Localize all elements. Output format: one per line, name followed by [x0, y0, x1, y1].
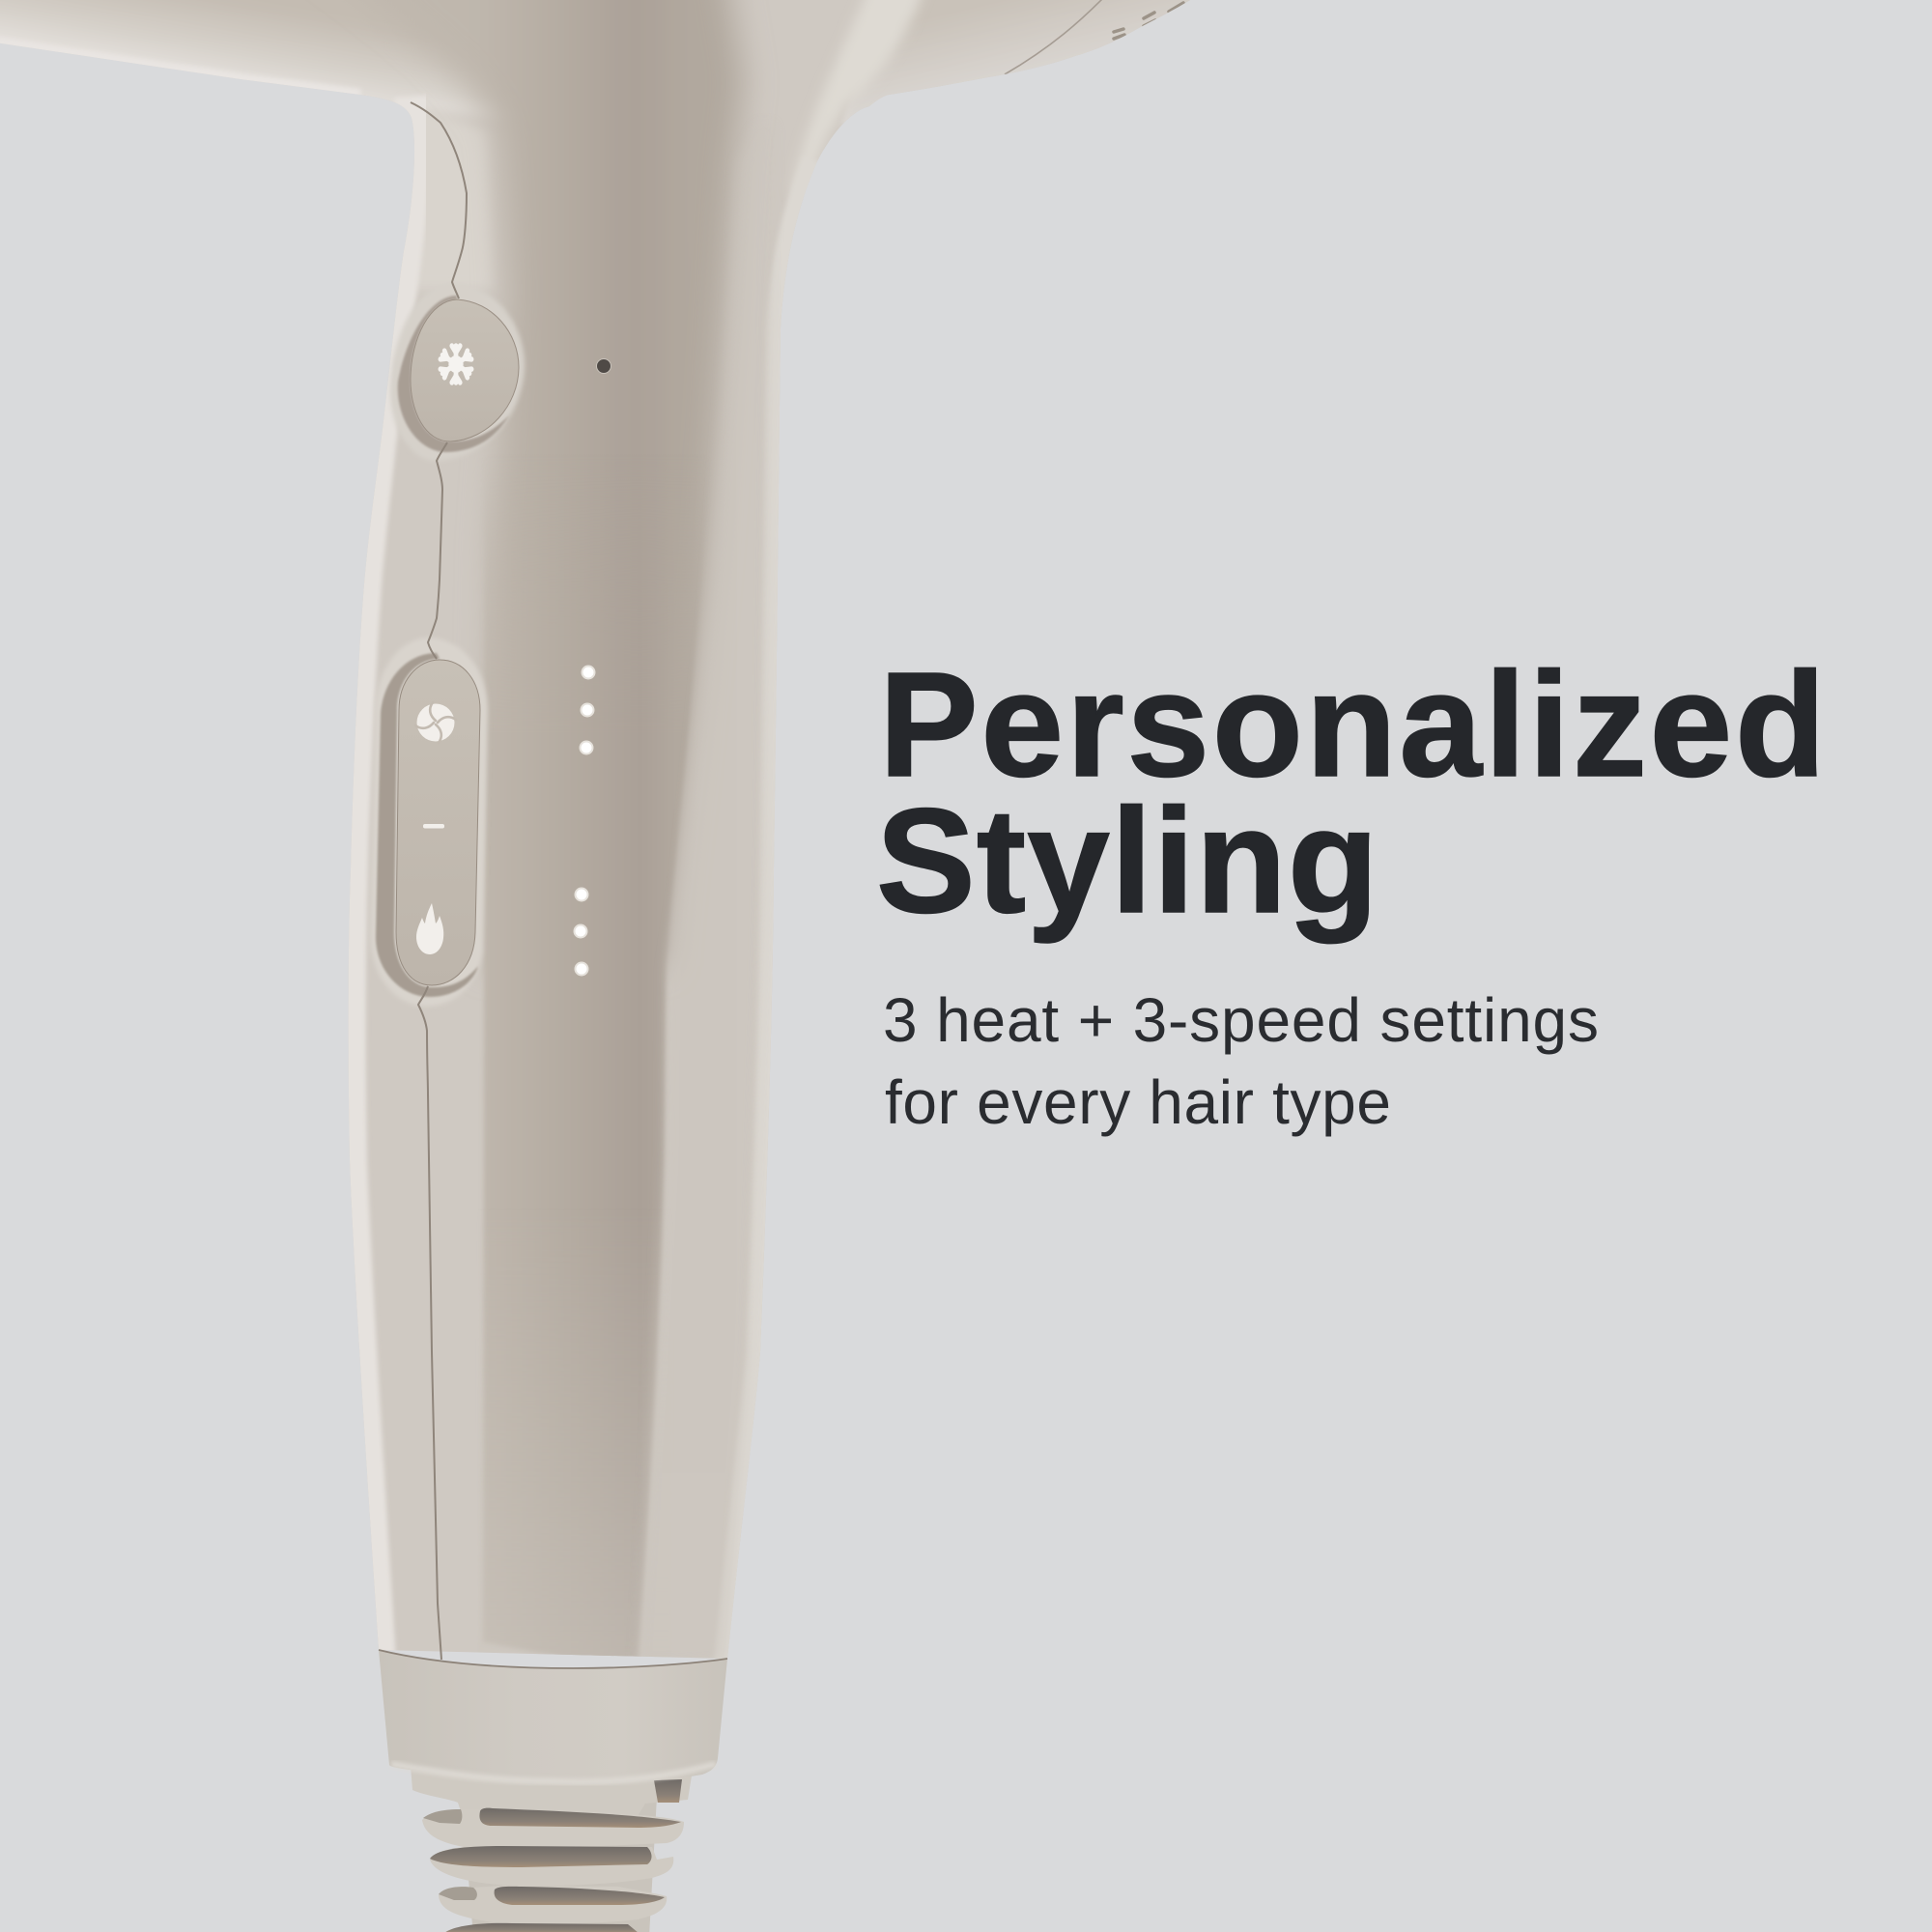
left edge highlight: [349, 97, 413, 1662]
subheading: 3 heat + 3-speed settings: [883, 985, 1599, 1055]
barrel right: [842, 0, 1142, 123]
heading: [876, 641, 1826, 944]
rocker recess: [376, 653, 478, 997]
icon: flame: [416, 903, 443, 954]
cool shot button: [390, 283, 525, 461]
hair dryer: [0, 0, 1222, 1932]
rocker face: [396, 660, 480, 985]
vent slots: [1114, 3, 1183, 39]
barrel left shading: [0, 0, 479, 115]
band light right: [717, 1499, 734, 1656]
lower lightening: [485, 1379, 649, 1656]
heat indicator lights: [574, 889, 587, 976]
central shaded zone upper: [442, 0, 753, 956]
right edge strip: [727, 161, 817, 1671]
barrel seam: [1005, 0, 1103, 74]
bright neck band: [800, 0, 923, 158]
dryer body: [0, 0, 1222, 1686]
central shaded zone lower: [483, 662, 692, 1657]
button face: [411, 299, 519, 441]
speed indicator lights: [580, 667, 595, 753]
rocker rim: [370, 638, 488, 1007]
subheading: for every hair type: [885, 1067, 1391, 1137]
collar: [379, 1650, 727, 1784]
indicator sensor dot: [597, 359, 611, 373]
cord strain relief: [411, 1766, 693, 1932]
icon: snowflake: [440, 346, 471, 383]
speed and heat rocker button: [370, 638, 488, 1007]
body seam line: [411, 102, 467, 1660]
body base: [365, 0, 867, 1658]
button recess: [398, 296, 509, 452]
icon: off dash: [423, 824, 444, 829]
icon: fan: [415, 702, 456, 743]
heading: Styling: [876, 778, 1378, 944]
button rim: [390, 283, 525, 461]
neck left light area: [420, 119, 489, 286]
heading: Personalized: [879, 641, 1826, 808]
subheading: [883, 985, 1599, 1137]
barrel edge highlight: [0, 43, 360, 95]
